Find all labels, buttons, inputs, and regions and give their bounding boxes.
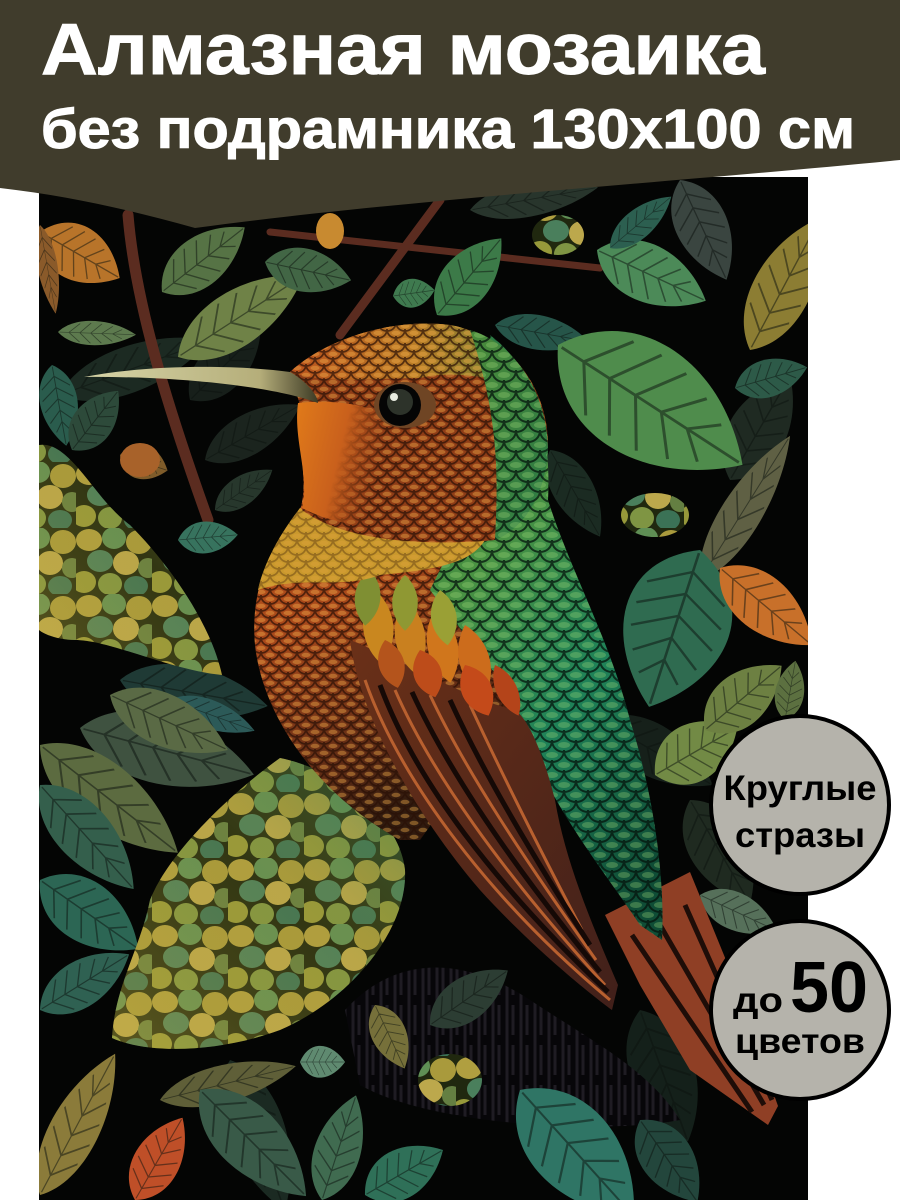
throat (297, 402, 385, 530)
badge: up to 50 colours: цветов (735, 1022, 865, 1061)
illustration: hummingbird among foliage (18, 169, 846, 1200)
badge: up to 50 colours: 50 (790, 948, 868, 1028)
wing (350, 640, 618, 1010)
badge: round rhinestones: стразы (735, 816, 865, 855)
small flowers (120, 213, 689, 1106)
eye (374, 382, 436, 428)
dark background foliage (52, 169, 815, 1200)
body: green back (430, 335, 663, 940)
foliage: upper and side leaves (26, 185, 846, 948)
tail (605, 872, 778, 1125)
head (290, 323, 548, 542)
beak (84, 367, 318, 403)
flower cluster upper left (39, 445, 222, 675)
yellow collar (258, 508, 485, 590)
badge: up to 50 colours: до (733, 981, 783, 1020)
flower cluster lower (112, 758, 405, 1049)
badge: round rhinestones: Круглые (724, 769, 876, 808)
green nape (470, 330, 548, 540)
title (41, 10, 855, 160)
badge: up to 50 colours (711, 921, 889, 1099)
foliage: lower left leaves (18, 671, 719, 1200)
branches (128, 200, 600, 520)
crown (290, 323, 500, 380)
header banner (0, 0, 900, 228)
body: chest (254, 464, 507, 840)
bird (84, 323, 778, 1125)
dark perch texture (345, 968, 680, 1127)
title: Алмазная мозаика (41, 10, 766, 90)
badge: round rhinestones (711, 716, 889, 894)
subtitle: без подрамника 130х100 см (41, 97, 855, 160)
upper wing feathers (354, 575, 520, 716)
